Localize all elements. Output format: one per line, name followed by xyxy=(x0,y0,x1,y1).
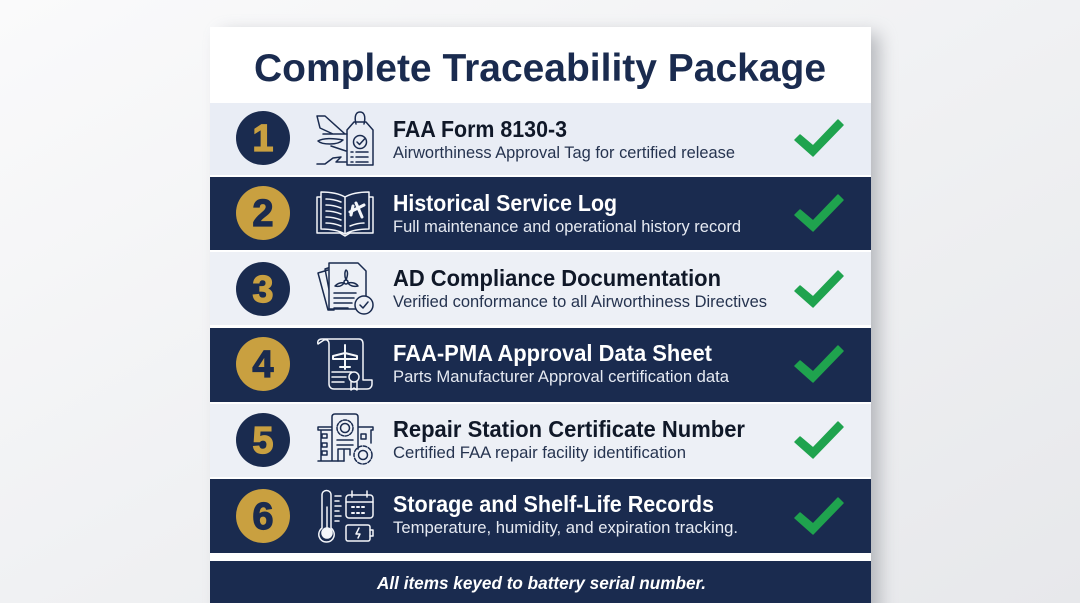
icon: repair station building xyxy=(318,414,373,464)
row 3: AD Compliance Documentation xyxy=(210,252,871,325)
heading: AD Compliance Documentation xyxy=(393,265,721,291)
number badge 1: 1 xyxy=(252,118,274,160)
row 4: FAA-PMA Approval Data Sheet xyxy=(210,328,871,402)
heading: FAA Form 8130-3 xyxy=(393,116,567,142)
number badge 5 xyxy=(236,413,290,467)
number badge 4 xyxy=(236,337,290,391)
number badge 1 xyxy=(236,111,290,165)
panel: traceability card xyxy=(210,27,871,603)
number badge 2: 2 xyxy=(252,193,274,235)
icon: green check xyxy=(795,195,843,231)
number badge 6: 6 xyxy=(252,496,274,538)
icon: approval certificate scroll xyxy=(318,339,372,390)
number badge 3 xyxy=(236,262,290,316)
icon: open log book xyxy=(317,192,373,236)
heading: Historical Service Log xyxy=(393,190,617,216)
icon: green check xyxy=(795,498,843,534)
heading: Storage and Shelf-Life Records xyxy=(393,491,714,517)
row 5: Repair Station Certificate Number xyxy=(210,404,871,477)
description: Full maintenance and operational history record xyxy=(393,218,741,236)
icon: plane and approval tag xyxy=(317,112,373,165)
heading: FAA-PMA Approval Data Sheet xyxy=(393,340,712,366)
heading: Repair Station Certificate Number xyxy=(393,416,745,442)
number badge 3: 3 xyxy=(252,269,274,311)
icon: thermometer, calendar and battery xyxy=(319,490,373,542)
icon: green check xyxy=(795,346,843,382)
description: Parts Manufacturer Approval certification data xyxy=(393,368,730,386)
footer banner: All items keyed to battery serial number. xyxy=(376,573,706,593)
description: Verified conformance to all Airworthiness Directives xyxy=(393,293,767,311)
number badge 6 xyxy=(236,489,290,543)
number badge 2 xyxy=(236,186,290,240)
icon: green check xyxy=(795,422,843,458)
icon: green check xyxy=(795,271,843,307)
number badge 5: 5 xyxy=(252,420,274,462)
description: Certified FAA repair facility identification xyxy=(393,444,686,462)
row 2: Historical Service Log xyxy=(210,177,871,250)
icon: green check xyxy=(795,120,843,156)
title: Complete Traceability Package xyxy=(254,47,826,90)
row 1: FAA Form 8130-3 xyxy=(210,103,871,175)
description: Temperature, humidity, and expiration tracking. xyxy=(393,519,738,537)
footer banner xyxy=(210,561,871,603)
icon: compliance documents xyxy=(318,263,373,314)
description: Airworthiness Approval Tag for certified release xyxy=(393,144,735,162)
number badge 4: 4 xyxy=(252,344,274,386)
row 6: Storage and Shelf-Life Records xyxy=(210,479,871,553)
